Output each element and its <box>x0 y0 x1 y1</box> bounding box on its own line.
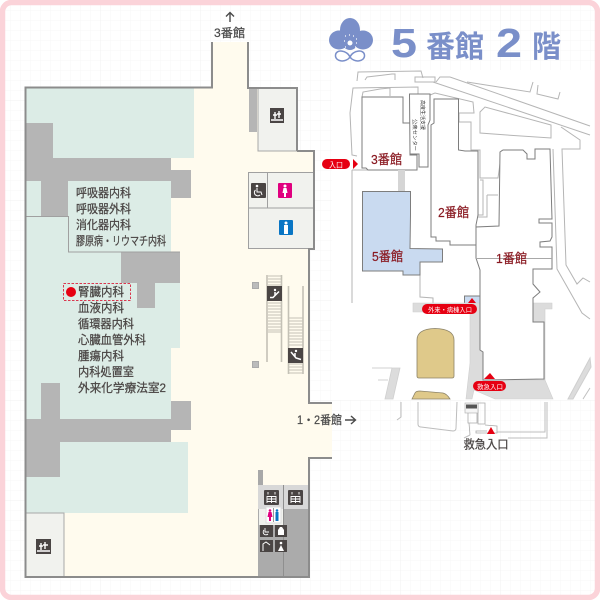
icon: accessible restroom <box>251 183 266 198</box>
east road piece <box>568 358 591 399</box>
site map <box>350 71 591 438</box>
entrance marker: emergency pill: 救急入口 <box>477 382 503 391</box>
icon: sink <box>260 540 273 552</box>
title: 番館 <box>426 31 484 64</box>
annex label: 高度生活支援 <box>419 100 426 130</box>
stair room: top right <box>258 88 297 151</box>
icon: ostomate <box>275 525 287 537</box>
icon: child <box>275 540 287 552</box>
icon: men restroom <box>279 220 293 235</box>
title <box>391 20 561 66</box>
label: building 1: 1番館 <box>496 251 527 266</box>
site outlines <box>350 71 590 319</box>
department list: upper <box>76 186 166 248</box>
label: to building 3 <box>214 12 245 40</box>
label: to building 3: 3番館 <box>214 26 245 40</box>
department list: lower: 心臓血管外科 <box>78 332 146 347</box>
department list: lower: 循環器内科 <box>78 317 134 331</box>
escalator: down <box>288 286 303 374</box>
building 3 <box>362 97 417 170</box>
icon: elevator left <box>264 490 279 505</box>
department zone outline <box>26 216 180 252</box>
floor plan columns <box>252 282 258 368</box>
escalator: up <box>267 275 282 362</box>
emergency bay outlines <box>468 403 497 435</box>
entrance marker: emergency <box>464 427 508 452</box>
entrance marker: outpatient <box>422 298 477 314</box>
road: east strip <box>533 303 552 380</box>
building walls <box>26 42 332 577</box>
icon: flower logo <box>329 18 373 61</box>
corridor floor <box>26 42 332 577</box>
icon: restroom pair <box>266 507 281 523</box>
highlight: nephrology: 腎臓内科 <box>78 285 124 299</box>
parking area: upper <box>417 328 454 378</box>
icon: stairs bottom <box>36 539 51 554</box>
entrance marker: emergency pill <box>473 373 506 391</box>
department list: lower: 腫瘍内科 <box>78 349 124 363</box>
stair room: bottom left <box>26 513 64 577</box>
label: building 2: 2番館 <box>438 205 469 220</box>
highlight: nephrology <box>64 284 130 300</box>
icon: stairs top <box>270 108 284 123</box>
service core: grey blocks <box>26 88 257 477</box>
elevator and restroom core <box>258 470 309 577</box>
entrance marker: west: 入口 <box>329 160 343 170</box>
label: to buildings 1 and 2: 1・2番館 <box>297 413 342 427</box>
building 5 highlighted <box>362 192 442 275</box>
department list: upper: 呼吸器内科 <box>76 186 131 200</box>
ambulance icon <box>465 403 478 413</box>
label: building 3: 3番館 <box>371 152 402 167</box>
icon: elevator right <box>288 490 303 505</box>
department list: upper: 呼吸器外科 <box>76 202 131 216</box>
west road lines <box>372 368 392 380</box>
department list: upper: 膠原病・リウマチ内科 <box>76 234 166 248</box>
department list: lower: 血液内科 <box>78 301 124 315</box>
consultation area: green rooms <box>26 88 194 513</box>
entrance marker: outpatient: 外来・病棟入口 <box>428 305 472 314</box>
department list: lower: 内科処置室 <box>78 365 134 379</box>
connector <box>398 170 405 192</box>
entrance marker: west <box>322 159 358 170</box>
entrance marker: emergency: 救急入口 <box>464 436 508 452</box>
annex building <box>410 94 430 167</box>
department list: lower: 外来化学療法室2 <box>78 380 166 395</box>
title: 2 <box>496 20 522 66</box>
department list: lower <box>78 301 166 395</box>
building 1 <box>476 149 552 380</box>
floor plan <box>26 42 332 577</box>
building 1 divider <box>476 258 552 260</box>
department list: upper: 消化器内科 <box>76 218 131 232</box>
restroom block <box>248 172 314 248</box>
annex label second line: 公衆センター <box>411 119 418 151</box>
title: 5 <box>391 20 417 66</box>
building 2 <box>431 99 478 245</box>
east road line <box>583 388 590 399</box>
title: 階 <box>532 31 561 64</box>
road: grey surface <box>413 303 553 399</box>
small highlighted entrance block <box>464 296 480 304</box>
icon: accessible small <box>260 525 273 537</box>
icon: women restroom <box>278 183 292 198</box>
parking area: lower <box>412 391 450 399</box>
label: building 5: 5番館 <box>372 249 403 264</box>
emergency drive outlines <box>397 402 547 438</box>
west road piece <box>385 368 400 399</box>
